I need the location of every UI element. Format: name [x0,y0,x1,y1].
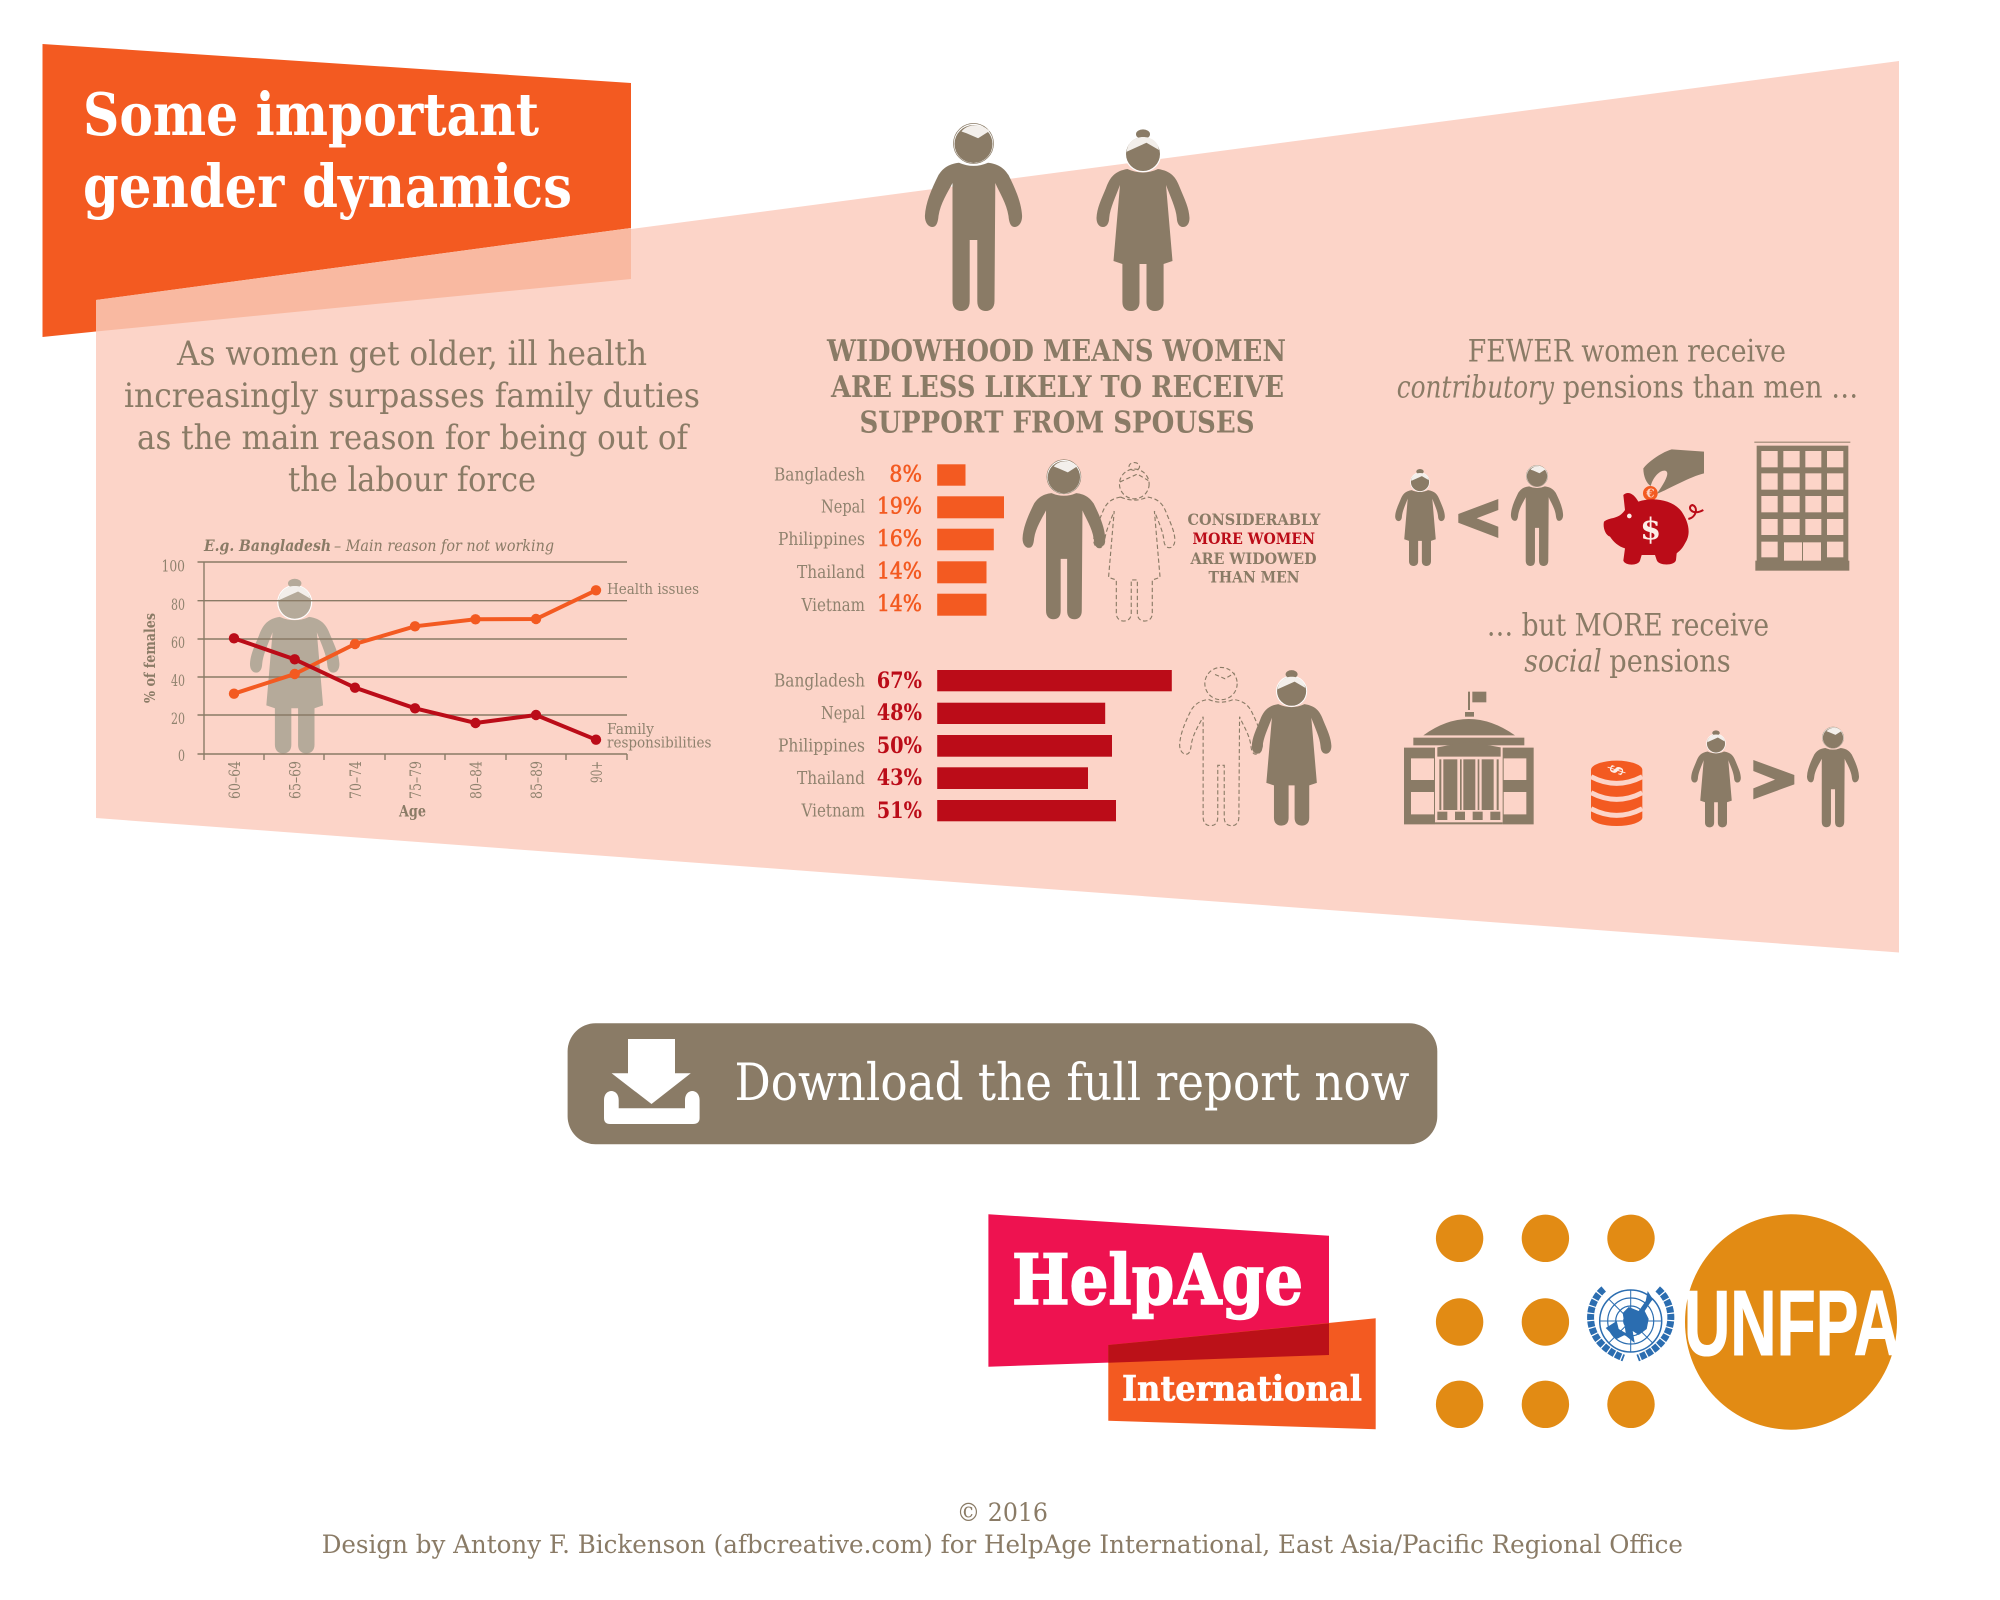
series labels: Family [607,722,655,738]
text: fewer women contributory pensions: FEWER women receive [1468,334,1786,370]
bar chart: widowed women: Vietnam [801,802,865,822]
footer credits: © 2016 [957,1498,1048,1527]
bar chart: widowed men: Vietnam [801,596,865,616]
y axis labels: 20 [171,710,185,728]
text: more receive social pensions [1487,608,1769,680]
icon: coin stack [1591,761,1642,826]
bar chart: widowed women: Nepal [821,704,865,724]
line chart: main reason for not working [141,536,711,821]
left text block: ill health [124,334,700,500]
logo: HelpAge International: HelpAge [1012,1240,1303,1321]
heading: widowhood: WIDOWHOOD MEANS WOMEN [826,334,1286,369]
callout: more women are widowed: ARE WIDOWED [1190,549,1317,568]
bar chart: widowed women [774,668,1172,824]
bar chart: widowed men: 16% [877,527,922,552]
series labels [607,582,711,752]
bar chart: widowed men: Thailand [797,563,865,583]
bar chart: widowed men: Bangladesh [774,466,865,486]
bar chart: widowed women: Thailand [797,769,865,789]
icon: woman less than man [1395,465,1563,566]
bar chart: widowed women: 43% [877,765,922,791]
bar chart: widowed men: 14% [877,592,922,617]
text: fewer women contributory pensions: contributory [1397,369,1554,405]
x axis title: Age [398,802,426,821]
chart title [203,536,554,555]
y axis labels: 80 [171,596,185,614]
footer credits [322,1498,1683,1559]
icon: office building [1754,442,1850,571]
icon: government building [1404,692,1534,824]
text: fewer women contributory pensions: pensions than men … [1563,369,1858,405]
bar chart: widowed men: 8% [889,463,922,488]
x axis labels [226,761,606,799]
heading: widowhood: ARE LESS LIKELY TO RECEIVE [830,370,1284,405]
y axis labels: 0 [178,747,185,765]
icon: download arrow [604,1039,700,1124]
bar chart: widowed men: 19% [877,494,922,519]
x axis labels: 60–64 [226,761,244,799]
x axis labels: 80–84 [468,761,486,799]
bar chart: widowed men [774,463,1004,617]
icon: woman behind chart [250,579,339,753]
left text block: ill health: As women get older, ill health [176,334,647,374]
icon: UN emblem [1591,1289,1671,1358]
series: health issues [229,585,601,699]
icon: piggy bank with hand and coin [1604,449,1704,565]
chart title: E.g. Bangladesh [203,536,331,555]
bar chart: widowed men: Philippines [778,530,865,550]
title banner: Some important [83,80,539,149]
callout: more women are widowed: MORE WOMEN [1192,529,1315,548]
text: more receive social pensions: social [1524,644,1602,680]
left text block: ill health: as the main reason for being out of [137,418,690,458]
left text block: ill health: the labour force [288,460,536,500]
bar chart: widowed women: Bangladesh [774,672,865,692]
icon: piggy bank with hand and coin: € [1645,487,1655,501]
logo: HelpAge International: International [1122,1369,1362,1410]
bar chart: widowed men: 14% [877,560,922,585]
button: download report: Download the full report now [734,1054,1410,1113]
y axis title: % of females [141,613,159,703]
y axis labels: 100 [162,558,185,576]
x axis labels: 70–74 [347,761,365,799]
y axis labels [162,558,185,765]
heading: widowhood [826,334,1286,441]
x axis labels: 90+ [588,761,606,783]
x axis labels: 75–79 [407,761,425,799]
logo: HelpAge International [988,1214,1376,1429]
icon: old man and old woman [925,124,1190,311]
left text block: ill health: increasingly surpasses family duties [124,376,700,416]
bar chart: widowed men: Nepal [821,498,865,518]
bar chart: widowed women: 67% [877,668,922,694]
title banner: gender dynamics [83,152,572,221]
icon: woman with dashed absent husband [1180,667,1331,826]
logo: UNFPA [1436,1214,1900,1430]
callout: more women are widowed: THAN MEN [1208,568,1300,587]
x axis labels: 65–69 [286,761,304,799]
footer credits: Design by Antony F. Bickenson (afbcreative.com) for HelpAge International, East Asia/Pacific Regional Office [322,1530,1683,1559]
x axis labels: 85–89 [528,761,546,799]
y axis labels: 60 [171,634,185,652]
bar chart: widowed women: 51% [877,798,922,824]
bar chart: widowed women: 48% [877,700,922,726]
bar chart: widowed women: Philippines [778,737,865,757]
panel: pink background [96,61,1899,952]
icon: coin stack: $ [1603,762,1630,778]
heading: widowhood: SUPPORT FROM SPOUSES [860,406,1254,441]
series: family responsibilities [229,633,601,745]
text: fewer women contributory pensions [1397,334,1858,405]
icon: piggy bank with hand and coin: $ [1640,512,1661,547]
logo: UNFPA: UNFPA [1684,1271,1900,1375]
icon: woman greater than man [1691,727,1859,827]
y axis labels: 40 [171,672,185,690]
text: more receive social pensions: … but MORE receive [1487,608,1769,644]
series labels: responsibilities [607,736,711,752]
callout: more women are widowed: CONSIDERABLY [1188,510,1321,529]
text: more receive social pensions: pensions [1609,644,1731,680]
title banner [42,44,631,337]
bar chart: widowed women: 50% [877,733,922,759]
series labels: Health issues [607,582,699,598]
button: download report [568,1023,1437,1144]
icon: man with dashed absent wife [1023,460,1175,621]
callout: more women are widowed [1188,510,1321,587]
chart title: – Main reason for not working [334,536,554,555]
